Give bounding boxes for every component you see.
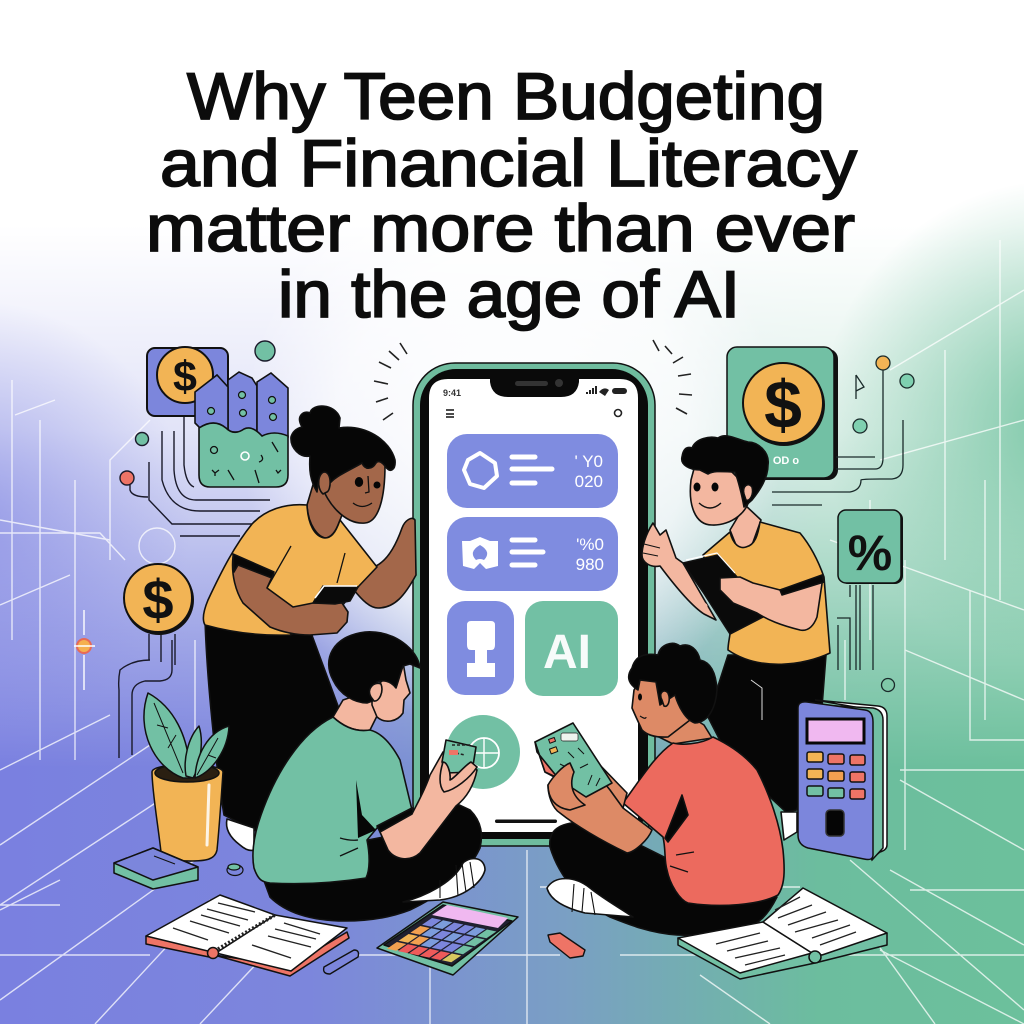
app tile: globe	[446, 715, 520, 789]
arm	[380, 752, 477, 859]
settings icon	[614, 410, 622, 416]
far hand	[580, 760, 627, 812]
icon: dollar coin left: $	[142, 568, 174, 631]
left arm and hand	[642, 523, 716, 620]
near arm	[233, 557, 348, 635]
small green token	[227, 864, 243, 876]
title: in the age of AI	[278, 257, 740, 331]
calculator on floor	[377, 902, 518, 975]
radiating lines right	[653, 340, 692, 414]
title: Why Teen Budgeting	[187, 59, 825, 133]
icon: green dollar card: OD o	[773, 455, 799, 467]
person: boy in green	[253, 632, 485, 921]
budget card 1: ' Y0	[575, 452, 603, 471]
icon: percent card	[838, 510, 903, 584]
pants	[263, 803, 481, 921]
icon: buildings and green block	[195, 372, 288, 487]
ear	[661, 691, 669, 706]
person: girl in yellow	[203, 406, 416, 850]
circuit lines left	[74, 341, 275, 758]
budget card 2: 980	[576, 555, 604, 574]
status bar: 9:41	[443, 388, 461, 398]
face	[372, 662, 410, 721]
face	[690, 460, 750, 525]
far arm	[354, 518, 416, 608]
shirt	[703, 522, 830, 664]
face	[322, 440, 385, 523]
budget card 2: '%0	[576, 535, 604, 554]
face	[632, 680, 690, 737]
hair	[291, 406, 395, 492]
phone in hand	[313, 586, 358, 604]
menu icon	[446, 410, 454, 417]
budget card 1: 020	[575, 472, 603, 491]
eyes and smile	[355, 477, 363, 487]
title: and Financial Literacy	[160, 126, 857, 200]
title	[146, 59, 857, 331]
open book left	[146, 895, 349, 976]
eyes and smile	[694, 482, 700, 492]
hair	[329, 632, 420, 703]
hair	[682, 436, 768, 507]
calculator	[535, 723, 612, 797]
keypad	[387, 918, 496, 962]
right arm	[720, 577, 823, 630]
icon: green dollar card	[727, 347, 838, 480]
app tile: lamp	[447, 601, 514, 695]
hand	[548, 763, 585, 810]
neck	[730, 505, 761, 548]
budget card 2	[447, 517, 618, 591]
arm	[548, 762, 652, 853]
radiating lines left	[374, 343, 407, 420]
neck	[333, 690, 378, 730]
shirt	[623, 737, 784, 905]
shoe	[227, 819, 254, 850]
hair	[629, 643, 717, 723]
ear	[744, 485, 753, 500]
icon: percent card: %	[848, 525, 892, 581]
neck	[307, 478, 342, 538]
status bar	[443, 379, 627, 398]
shirt	[203, 505, 377, 635]
eye and smile	[638, 694, 642, 700]
neck	[655, 710, 712, 744]
open book right	[678, 888, 887, 979]
icon: dollar coin left	[124, 564, 194, 635]
app tile: AI	[525, 601, 618, 696]
pants	[708, 655, 826, 812]
pants	[205, 620, 345, 832]
ear	[369, 683, 382, 701]
eraser	[548, 933, 585, 958]
pants	[550, 822, 777, 935]
person: boy in red	[535, 643, 784, 935]
book	[683, 555, 763, 634]
icon: dollar card	[147, 347, 228, 416]
shirt	[253, 717, 412, 884]
person: boy in yellow	[642, 436, 830, 840]
marker	[324, 950, 358, 974]
shoe	[547, 879, 633, 917]
phone	[442, 740, 476, 773]
phone	[413, 363, 655, 846]
icon: dollar card: $	[173, 353, 197, 401]
plant in pot	[144, 693, 229, 861]
green book on floor	[114, 848, 198, 889]
calculator: standing blue	[798, 700, 887, 860]
shoe	[781, 812, 797, 840]
shoe	[403, 859, 485, 902]
icon: green dollar card: $	[764, 367, 802, 443]
circuit lines right	[772, 356, 914, 692]
app tile: AI: AI	[543, 626, 591, 679]
home indicator	[495, 820, 557, 823]
ear	[319, 472, 330, 494]
fingers	[440, 762, 477, 792]
budget card 1	[447, 434, 618, 508]
title: matter more than ever	[146, 191, 855, 265]
